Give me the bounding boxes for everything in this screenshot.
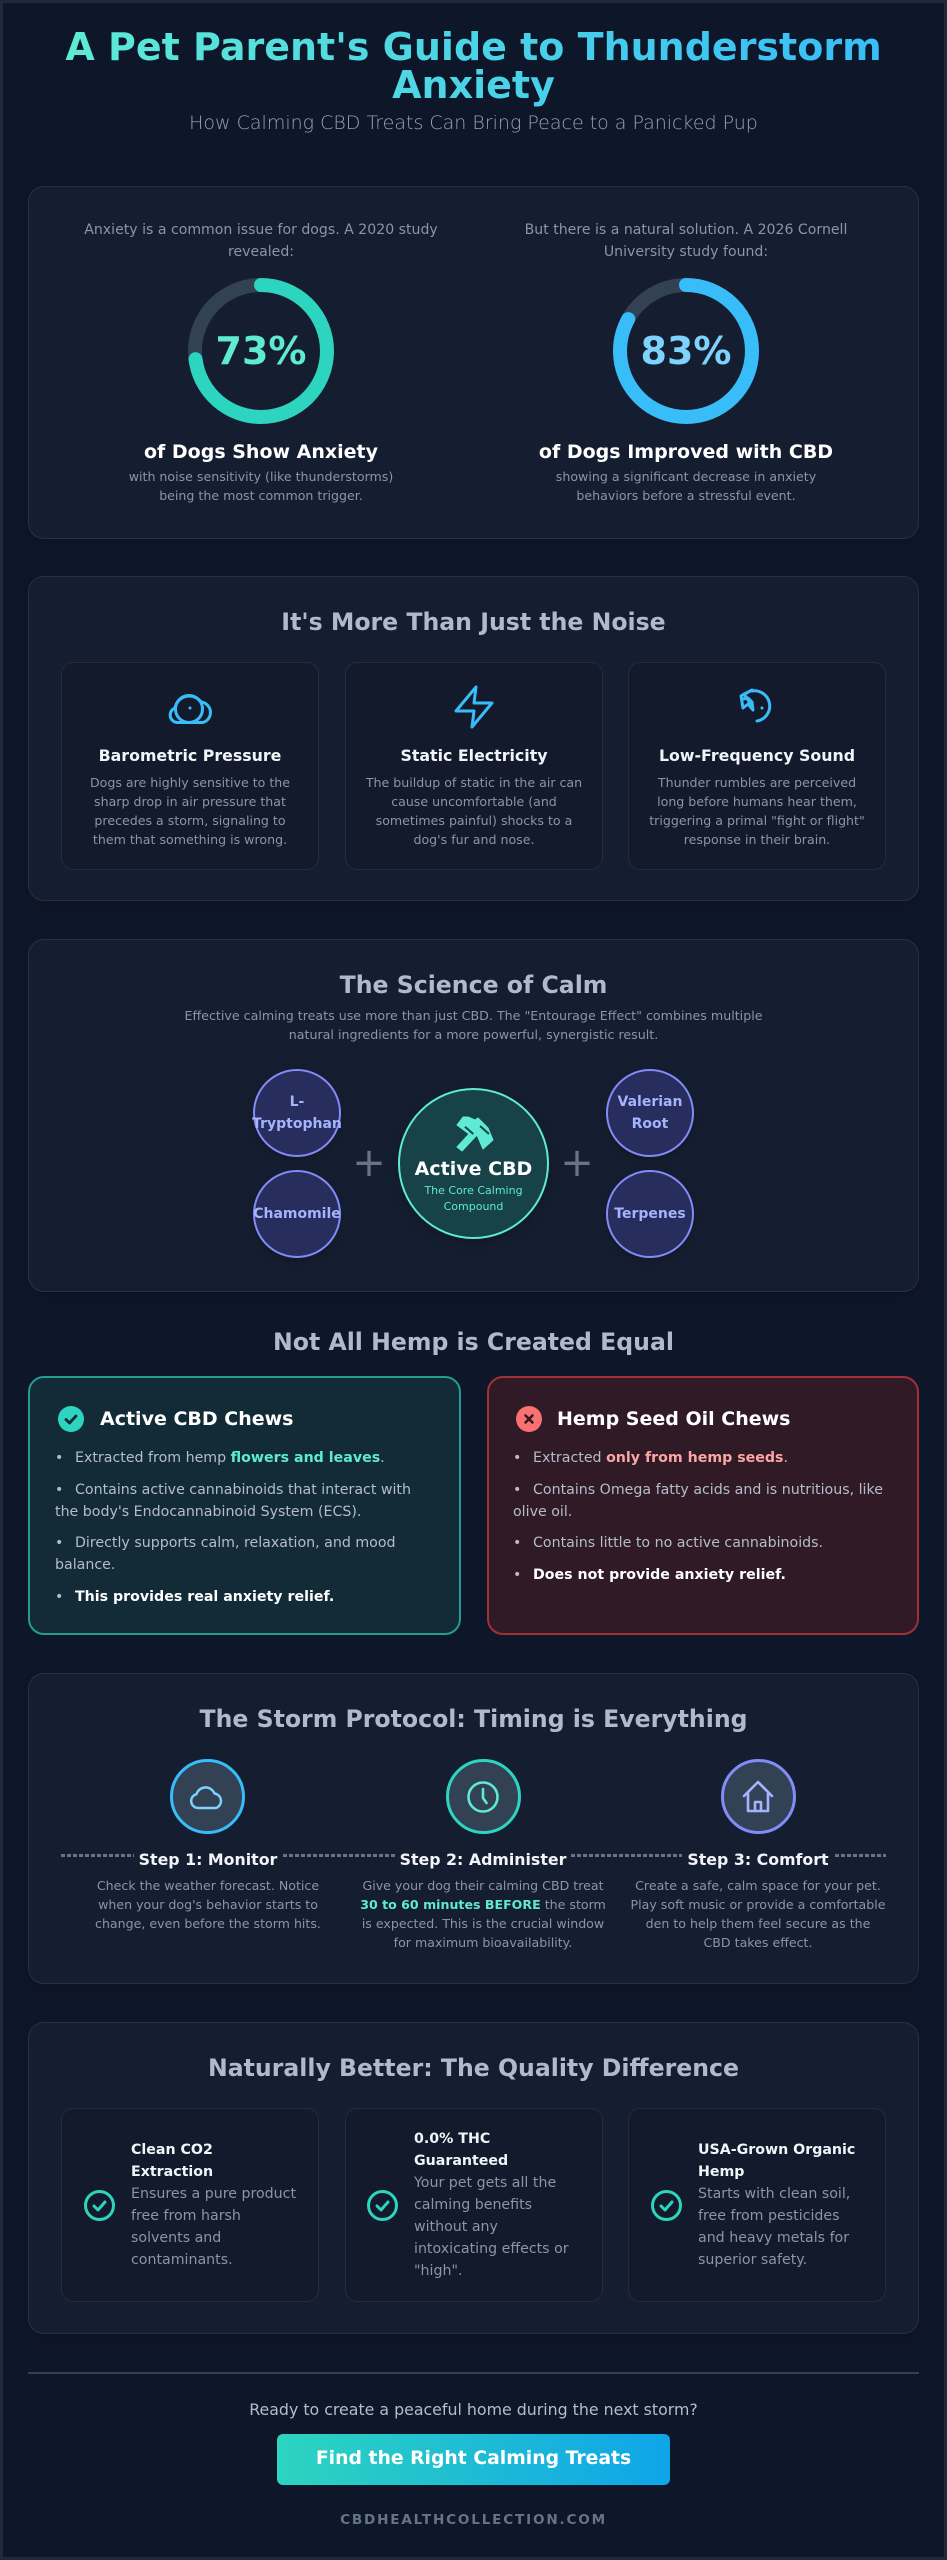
text: USA-grown hemp: superior safety. [698,2252,807,2268]
card text: barometric pressure: sharp drop in air pressure that [94,794,286,809]
ingredient: Chamomile [253,1170,341,1258]
button: find calming treats: Find the Right Calming Treats [316,2448,631,2469]
list: active CBD benefits: • [55,1450,63,1466]
icon: CBD molecule hammer [456,1116,494,1152]
icon: check circle 1 [84,2190,115,2221]
step 1 text: when your dog's behavior starts to [98,1896,318,1912]
heading: hemp comparison: Not All Hemp is Created Equal [273,1328,674,1356]
list item: real relief: • [55,1589,63,1605]
icon: barometric pressure [168,694,212,724]
text: USA-grown hemp: and heavy metals for [698,2230,849,2246]
card text: static electricity: The buildup of static in the air can [366,775,582,790]
list item: supports calm: balance. [55,1557,115,1573]
panel: storm protocol [28,1673,919,1984]
icon: x badge [516,1406,542,1432]
panel: active CBD chews [28,1376,461,1635]
card: static electricity [345,662,603,870]
step 3 text: den to help them feel secure as the [646,1916,870,1930]
card title: static electricity: Static Electricity [400,746,548,765]
panel: statistics [28,186,919,539]
heading: science of calm: The Science of Calm [340,971,607,999]
chart: 73% ring [188,278,334,424]
list item: omega: olive oil. [513,1504,572,1520]
step 3 text [631,1878,885,1950]
icon: house [742,1780,774,1812]
text: CO2 extraction: solvents and [131,2230,221,2246]
list item: real relief: This provides real anxiety relief. [75,1589,334,1605]
ingredient: L-Tryptophan [253,1069,341,1157]
step 1 text [95,1878,321,1930]
list item: little cannabinoids: Contains little to no active cannabinoids. [533,1535,823,1551]
step 2 circle [446,1759,520,1834]
intro text: entourage effect: natural ingredients for a more powerful, synergistic result. [289,1027,658,1042]
text: USA-grown hemp: free from pesticides [698,2208,840,2224]
list item: seeds only: • [513,1450,521,1466]
list item: cannabinoids: the body's Endocannabinoid System (ECS). [55,1504,361,1520]
list item: supports calm [55,1535,396,1573]
step 2 text [360,1878,606,1950]
list item: no relief: • [513,1567,521,1583]
stat detail left [129,469,393,503]
card text: low-frequency sound [649,775,865,847]
card text: static electricity: dog's fur and nose. [413,832,534,847]
stat label left: of Dogs Show Anxiety [144,441,378,463]
plus sign left: + [352,1140,386,1186]
intro text: entourage effect [184,1008,763,1042]
text: USA-grown hemp [698,2139,855,2271]
card text: barometric pressure [90,775,290,847]
text: zero THC: "high". [414,2262,462,2278]
text: USA-grown hemp: USA-Grown Organic [698,2142,855,2158]
stat detail right [556,469,816,503]
list item: omega: Contains Omega fatty acids and is nutritious, like [533,1482,883,1498]
list item: omega [513,1482,883,1520]
list item: cannabinoids: Contains active cannabinoids that interact with [75,1482,411,1498]
card text: low-frequency sound: response in their brain. [684,832,830,847]
step 1 text: Check the weather forecast. Notice [97,1878,319,1892]
ingredient label: Terpenes: Terpenes [614,1206,686,1222]
button: find calming treats [277,2434,670,2484]
card text: low-frequency sound: Thunder rumbles are perceived [658,775,856,790]
step 2 text: 30 to 60 minutes BEFORE the storm [360,1896,606,1912]
list: active CBD benefits: Extracted from hemp flowers and leaves. [75,1450,385,1466]
ingredient label: L-Tryptophan [252,1094,342,1132]
text: CO2 extraction: contaminants. [131,2252,233,2268]
ingredient label: Valerian Root [618,1094,682,1132]
card text: static electricity: cause uncomfortable (and [391,794,557,809]
divider [28,2372,919,2374]
comparison title: hemp seed oil chews: Hemp Seed Oil Chews [557,1408,790,1430]
card text: low-frequency sound: long before humans hear them, [657,794,857,809]
icon: clock [467,1781,499,1813]
step 1 title: Step 1: Monitor [139,1850,277,1869]
chart: 83% ring [613,278,759,424]
label: Active CBD: Active CBD [415,1158,532,1180]
text: CO2 extraction [131,2142,296,2268]
step 2 title: Step 2: Administer [400,1850,566,1869]
subtitle: How Calming CBD Treats Can Bring Peace to a Panicked Pup [189,112,758,134]
intro text: entourage effect: Effective calming treats use more than just CBD. The "Entourage Effect" combines multiple [184,1008,763,1022]
circle: Active CBD [398,1088,549,1239]
stat detail right: behaviors before a stressful event. [576,488,796,503]
title [65,25,882,107]
sublabel: core compound: Compound [444,1200,503,1213]
list item: seeds only: Extracted only from hemp seeds. [533,1450,788,1466]
icon: check circle 2 [367,2190,398,2221]
step 2 text: Give your dog their calming CBD treat [362,1878,604,1892]
step 3 text: CBD takes effect. [704,1934,812,1950]
text: CO2 extraction: Ensures a pure product [131,2186,296,2202]
stat intro left: revealed: [228,244,294,260]
ingredient label: Valerian Root: Root [632,1116,668,1132]
step 1 text: change, even before the storm hits. [95,1916,321,1930]
heading: triggers: It's More Than Just the Noise [281,608,666,636]
ingredient label: Chamomile: Chamomile [253,1206,341,1222]
plus sign right: + [560,1140,594,1186]
sublabel: core compound: The Core Calming [424,1184,523,1197]
title: A Pet Parent's Guide to Thunderstorm [65,25,882,69]
text: CO2 extraction: free from harsh [131,2208,241,2224]
title: Anxiety [392,63,555,107]
stat detail left: with noise sensitivity (like thunderstorms) [129,469,393,484]
list item: supports calm: • [55,1535,63,1551]
card: CO2 extraction [61,2108,319,2302]
text: zero THC: 0.0% THC [414,2130,490,2146]
comparison title: active CBD chews: Active CBD Chews [100,1408,293,1430]
icon: check badge [58,1406,84,1432]
timeline dashed line [61,1854,886,1857]
panel: hemp seed oil chews [487,1376,919,1635]
card text: static electricity: sometimes painful) shocks to a [376,813,572,828]
stat label right: of Dogs Improved with CBD [539,441,833,463]
step 2 text: for maximum bioavailability. [394,1934,572,1950]
text: USA-grown hemp: Starts with clean soil, [698,2186,850,2202]
card: USA-grown hemp [628,2108,886,2302]
text: zero THC: intoxicating effects or [414,2240,569,2256]
list item: no relief: Does not provide anxiety relief. [533,1567,786,1583]
ingredient label: L-Tryptophan: Tryptophan [252,1116,342,1132]
number: 73%: 73% [216,329,306,373]
list item: supports calm: Directly supports calm, relaxation, and mood [75,1535,396,1551]
stat intro right [525,222,847,260]
text: USA-grown hemp: Hemp [698,2164,744,2180]
step 3 text: Play soft music or provide a comfortable [631,1896,885,1912]
icon: cloud [190,1786,222,1810]
card text: barometric pressure: Dogs are highly sensitive to the [90,775,290,790]
text: CO2 extraction: Clean CO2 [131,2142,213,2158]
panel: science of calm [28,939,919,1292]
ingredient label: Valerian Root: Valerian [618,1094,682,1110]
panel: quality difference [28,2022,919,2334]
heading: quality difference: Naturally Better: The Quality Difference [208,2054,739,2082]
text: zero THC: calming benefits [414,2196,532,2212]
step 1 circle [170,1759,245,1834]
call to action text: Ready to create a peaceful home during the next storm? [249,2400,698,2419]
stat detail right: showing a significant decrease in anxiety [556,469,816,484]
stat intro right: University study found: [604,244,768,260]
list item: cannabinoids: • [55,1482,63,1498]
card: low-frequency sound [628,662,886,870]
step 2 text: is expected. This is the crucial window [362,1916,604,1930]
card text: low-frequency sound: triggering a primal "fight or flight" [649,813,865,828]
step 3 text: Create a safe, calm space for your pet. [635,1878,881,1892]
stat intro left: Anxiety is a common issue for dogs. A 2020 study [84,222,438,238]
text: zero THC: without any [414,2218,498,2234]
ingredient: Terpenes [606,1170,694,1258]
card: zero THC [345,2108,603,2302]
step 3 title: Step 3: Comfort [687,1850,829,1869]
card text: barometric pressure: them that something is wrong. [93,832,287,847]
sublabel: core compound [424,1184,523,1213]
panel: triggers [28,576,919,901]
card text: barometric pressure: precedes a storm, signaling to [94,813,286,828]
text: zero THC: Your pet gets all the [414,2174,556,2190]
list item: cannabinoids [55,1482,411,1520]
step 3 circle [720,1759,796,1834]
ingredient label: L-Tryptophan: L- [290,1094,304,1110]
card title: low-frequency sound: Low-Frequency Sound [659,746,855,765]
ingredient: Valerian Root [606,1069,694,1157]
card title: barometric pressure: Barometric Pressure [99,746,281,765]
stat detail left: being the most common trigger. [159,488,363,503]
footer website: CBDHEALTHCOLLECTION.COM [340,2512,607,2528]
heading: storm protocol: The Storm Protocol: Timing is Everything [199,1705,748,1733]
icon: lightning bolt [454,686,494,728]
text: zero THC [414,2128,569,2282]
list item: omega: • [513,1482,521,1498]
icon: low-frequency sound [740,688,772,722]
number: 83%: 83% [641,329,731,373]
stat intro left [84,222,438,260]
stat intro right: But there is a natural solution. A 2026 Cornell [525,222,847,238]
text: zero THC: Guaranteed [414,2152,508,2168]
icon: check circle 3 [651,2190,682,2220]
card text: static electricity [366,775,582,847]
card: barometric pressure [61,662,319,870]
text: CO2 extraction: Extraction [131,2164,213,2180]
list item: little cannabinoids: • [513,1535,521,1551]
